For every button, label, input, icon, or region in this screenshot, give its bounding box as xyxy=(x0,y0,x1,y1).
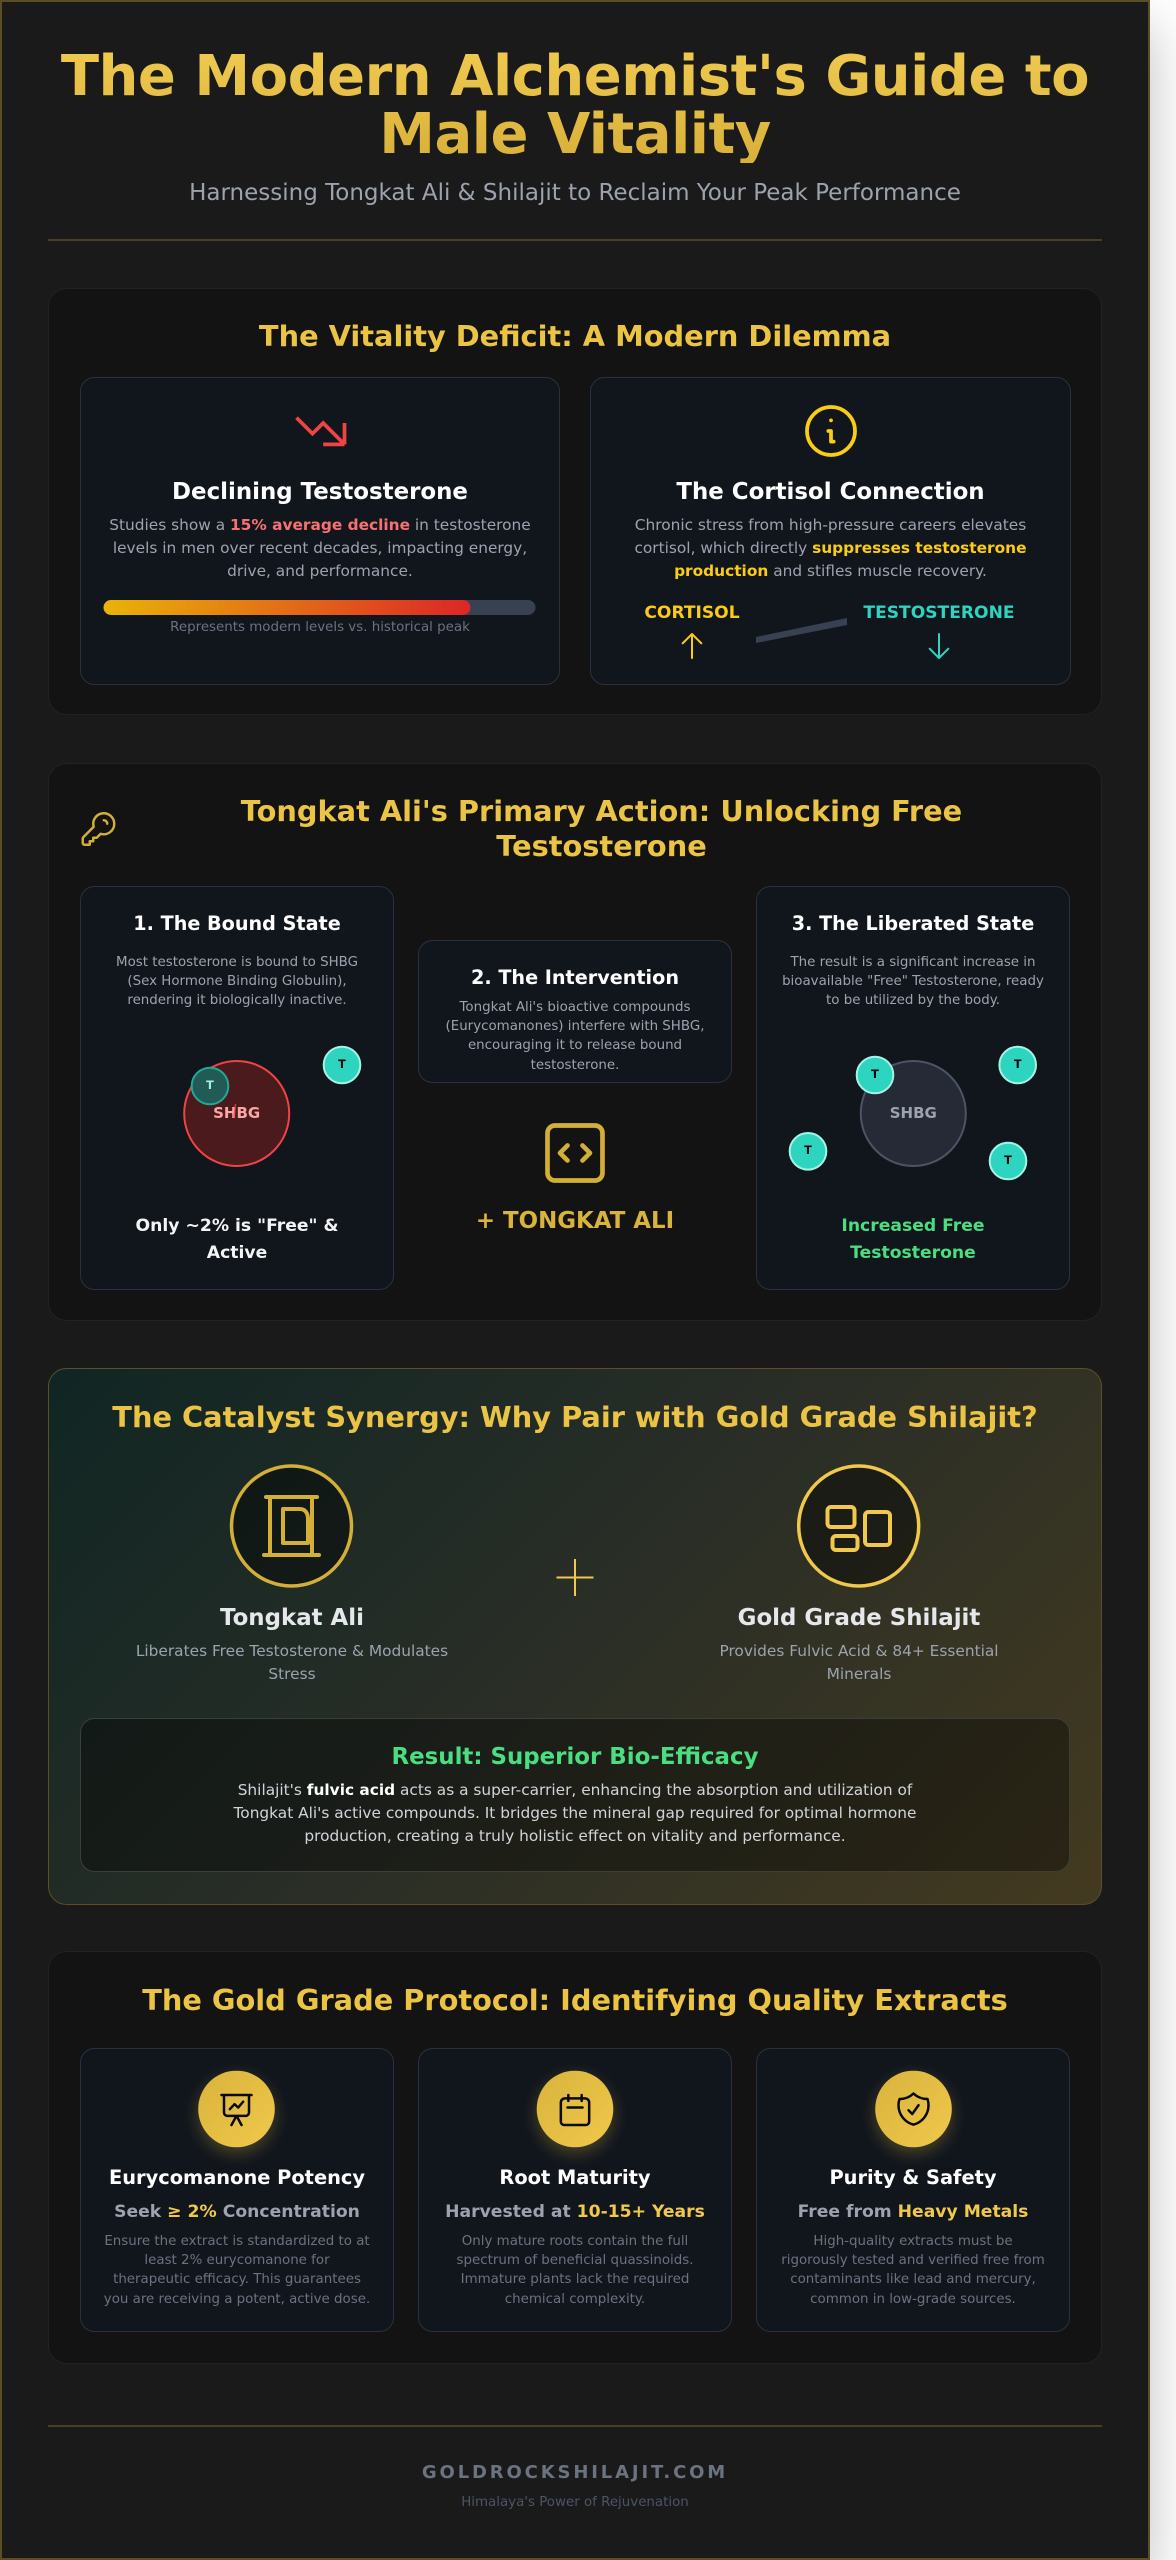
card text: least 2% eurycomanone for xyxy=(144,2253,330,2268)
bar caption: Represents modern levels vs. historical peak xyxy=(170,620,470,635)
testosterone label and down arrow: TESTOSTERONE xyxy=(863,603,1015,623)
card text: drive, and performance. xyxy=(227,562,413,580)
result heading: Result: Superior Bio-Efficacy xyxy=(392,1744,758,1770)
card text xyxy=(80,514,560,584)
card result xyxy=(756,1213,1070,1267)
card subheading: Seek ≥ 2% Concentration xyxy=(114,2202,360,2222)
card text: bioavailable "Free" Testosterone, ready xyxy=(782,974,1044,989)
card text xyxy=(80,2232,394,2310)
panel: the vitality deficit xyxy=(48,288,1102,714)
card text: levels in men over recent decades, impacting energy, xyxy=(113,539,527,557)
result text: production, creating a truly holistic effect on vitality and performance. xyxy=(304,1827,846,1845)
heading: vitality deficit: The Vitality Deficit: A Modern Dilemma xyxy=(259,319,891,353)
card text: (Eurycomanones) interfere with SHBG, xyxy=(446,1019,704,1034)
ingredient: gold grade shilajit: Provides Fulvic Acid & 84+ Essential xyxy=(719,1642,999,1660)
icon: calendar xyxy=(537,2071,613,2147)
panel: primary action xyxy=(48,764,1102,1320)
panel: gold grade protocol xyxy=(48,1952,1102,2364)
icon: shield check xyxy=(875,2071,952,2147)
inverse relationship bar xyxy=(756,618,847,643)
card text: Chronic stress from high-pressure careers elevates xyxy=(635,516,1026,534)
diagram: SHBG with bound testosterone xyxy=(184,1047,360,1166)
icon: code brackets xyxy=(547,1125,602,1180)
card text: chemical complexity. xyxy=(505,2292,645,2307)
diagram: SHBG with bound testosterone: T xyxy=(338,1058,346,1071)
subtitle: Harnessing Tongkat Ali & Shilajit to Reclaim Your Peak Performance xyxy=(189,180,961,206)
card text xyxy=(418,998,732,1075)
card text xyxy=(756,952,1070,1010)
card text: The result is a significant increase in xyxy=(790,954,1036,970)
ingredient: gold grade shilajit xyxy=(679,1603,1039,1687)
footer website: GOLDROCKSHILAJIT.COM xyxy=(422,2462,728,2483)
ingredient: tongkat ali xyxy=(112,1603,472,1687)
card text xyxy=(590,514,1071,584)
card: root maturity xyxy=(418,2048,732,2332)
plus sign xyxy=(556,1559,594,1596)
icon: key xyxy=(83,813,114,845)
card heading: The Cortisol Connection xyxy=(676,479,985,505)
ingredient: gold grade shilajit: Gold Grade Shilajit xyxy=(738,1605,980,1631)
card result: Active xyxy=(207,1243,267,1263)
panel: catalyst synergy xyxy=(48,1368,1102,1904)
card heading: Root Maturity xyxy=(499,2166,651,2188)
card heading: 2. The Intervention xyxy=(471,966,679,988)
footer xyxy=(0,2425,1150,2512)
header xyxy=(0,48,1150,241)
card text: rigorously tested and verified free from xyxy=(781,2253,1045,2268)
card text: rendering it biologically inactive. xyxy=(127,993,347,1008)
card heading: Declining Testosterone xyxy=(172,479,468,505)
heading: catalyst synergy: The Catalyst Synergy: Why Pair with Gold Grade Shilajit? xyxy=(112,1400,1038,1434)
heading: primary action xyxy=(122,794,1082,864)
card text xyxy=(80,952,394,1010)
testosterone label and down arrow xyxy=(839,601,1039,658)
card: eurycomanone potency xyxy=(80,2048,394,2332)
card text: Only mature roots contain the full xyxy=(462,2234,688,2249)
card text: therapeutic efficacy. This guarantees xyxy=(113,2272,361,2287)
icon: presentation chart xyxy=(198,2071,275,2147)
diagram: SHBG with free testosterone: T xyxy=(1004,1154,1012,1167)
card text: Studies show a 15% average decline in testosterone xyxy=(109,516,531,534)
diagram: SHBG with free testosterone: T xyxy=(871,1068,879,1081)
card text: common in low-grade sources. xyxy=(810,2292,1016,2307)
card text: High-quality extracts must be xyxy=(813,2234,1013,2249)
diagram: SHBG with free testosterone: T xyxy=(1014,1058,1022,1071)
card text: testosterone. xyxy=(531,1058,619,1073)
card heading: 1. The Bound State xyxy=(133,912,341,934)
heading: gold grade protocol: The Gold Grade Protocol: Identifying Quality Extracts xyxy=(142,1982,1008,2016)
card heading: 3. The Liberated State xyxy=(792,912,1034,934)
card heading: Eurycomanone Potency xyxy=(109,2166,365,2188)
card text xyxy=(418,2232,732,2310)
icon: trending down xyxy=(297,418,345,444)
card result: Increased Free xyxy=(841,1216,985,1236)
result box xyxy=(80,1718,1070,1872)
ingredient: tongkat ali: Stress xyxy=(268,1665,316,1683)
icon: tongkat ali xyxy=(232,1466,352,1586)
icon: info xyxy=(807,407,855,455)
cortisol label and up arrow: CORTISOL xyxy=(644,603,740,623)
card: declining testosterone xyxy=(80,378,560,684)
card result: Only ~2% is "Free" & xyxy=(136,1216,338,1236)
cortisol label and up arrow xyxy=(592,601,792,658)
ingredient: tongkat ali: Tongkat Ali xyxy=(220,1605,364,1631)
title xyxy=(0,48,1150,164)
footer tagline: Himalaya's Power of Rejuvenation xyxy=(461,2494,689,2510)
card subheading: Harvested at 10-15+ Years xyxy=(445,2202,705,2222)
card subheading: Free from Heavy Metals xyxy=(798,2202,1028,2222)
ingredient: gold grade shilajit: Minerals xyxy=(827,1665,891,1683)
card text: production and stifles muscle recovery. xyxy=(674,562,987,580)
result text: Tongkat Ali's active compounds. It bridges the mineral gap required for optimal hormone xyxy=(234,1804,916,1822)
heading: primary action: Testosterone xyxy=(496,829,707,863)
card result xyxy=(80,1213,394,1267)
card heading: Purity & Safety xyxy=(829,2166,997,2188)
card: liberated state xyxy=(756,886,1070,1290)
diagram: SHBG with bound testosterone: T xyxy=(206,1079,214,1092)
card: purity and safety xyxy=(756,2048,1070,2332)
result text: Shilajit's fulvic acid acts as a super-carrier, enhancing the absorption and utilization of xyxy=(238,1781,912,1799)
card text: spectrum of beneficial quassinoids. xyxy=(457,2253,693,2268)
label: plus tongkat ali: + TONGKAT ALI xyxy=(476,1208,674,1234)
diagram: SHBG with free testosterone: SHBG xyxy=(890,1104,937,1122)
card text: Tongkat Ali's bioactive compounds xyxy=(460,1000,690,1015)
card text: Immature plants lack the required xyxy=(461,2272,689,2287)
card: bound state xyxy=(80,886,394,1290)
card text: you are receiving a potent, active dose. xyxy=(104,2292,370,2307)
heading: primary action: Tongkat Ali's Primary Action: Unlocking Free xyxy=(241,794,962,828)
diagram: SHBG with bound testosterone: SHBG xyxy=(213,1104,260,1122)
card text xyxy=(756,2232,1070,2310)
ingredient: tongkat ali: Liberates Free Testosterone & Modulates xyxy=(136,1642,448,1660)
card text: to be utilized by the body. xyxy=(826,993,1000,1008)
card text: (Sex Hormone Binding Globulin), xyxy=(127,974,347,989)
card text: cortisol, which directly suppresses testosterone xyxy=(634,539,1027,557)
card text: Most testosterone is bound to SHBG xyxy=(116,954,358,970)
progress bar xyxy=(104,600,536,615)
card text: encouraging it to release bound xyxy=(468,1038,682,1053)
card text: Ensure the extract is standardized to at xyxy=(104,2234,370,2249)
icon: gold grade shilajit xyxy=(799,1466,919,1586)
card: cortisol connection xyxy=(590,378,1071,684)
result text xyxy=(80,1779,1070,1849)
card: the intervention xyxy=(418,940,732,1082)
card text: contaminants like lead and mercury, xyxy=(790,2272,1036,2287)
diagram: SHBG with free testosterone: T xyxy=(804,1144,812,1157)
card result: Testosterone xyxy=(850,1243,976,1263)
diagram: SHBG with free testosterone xyxy=(790,1047,1036,1179)
